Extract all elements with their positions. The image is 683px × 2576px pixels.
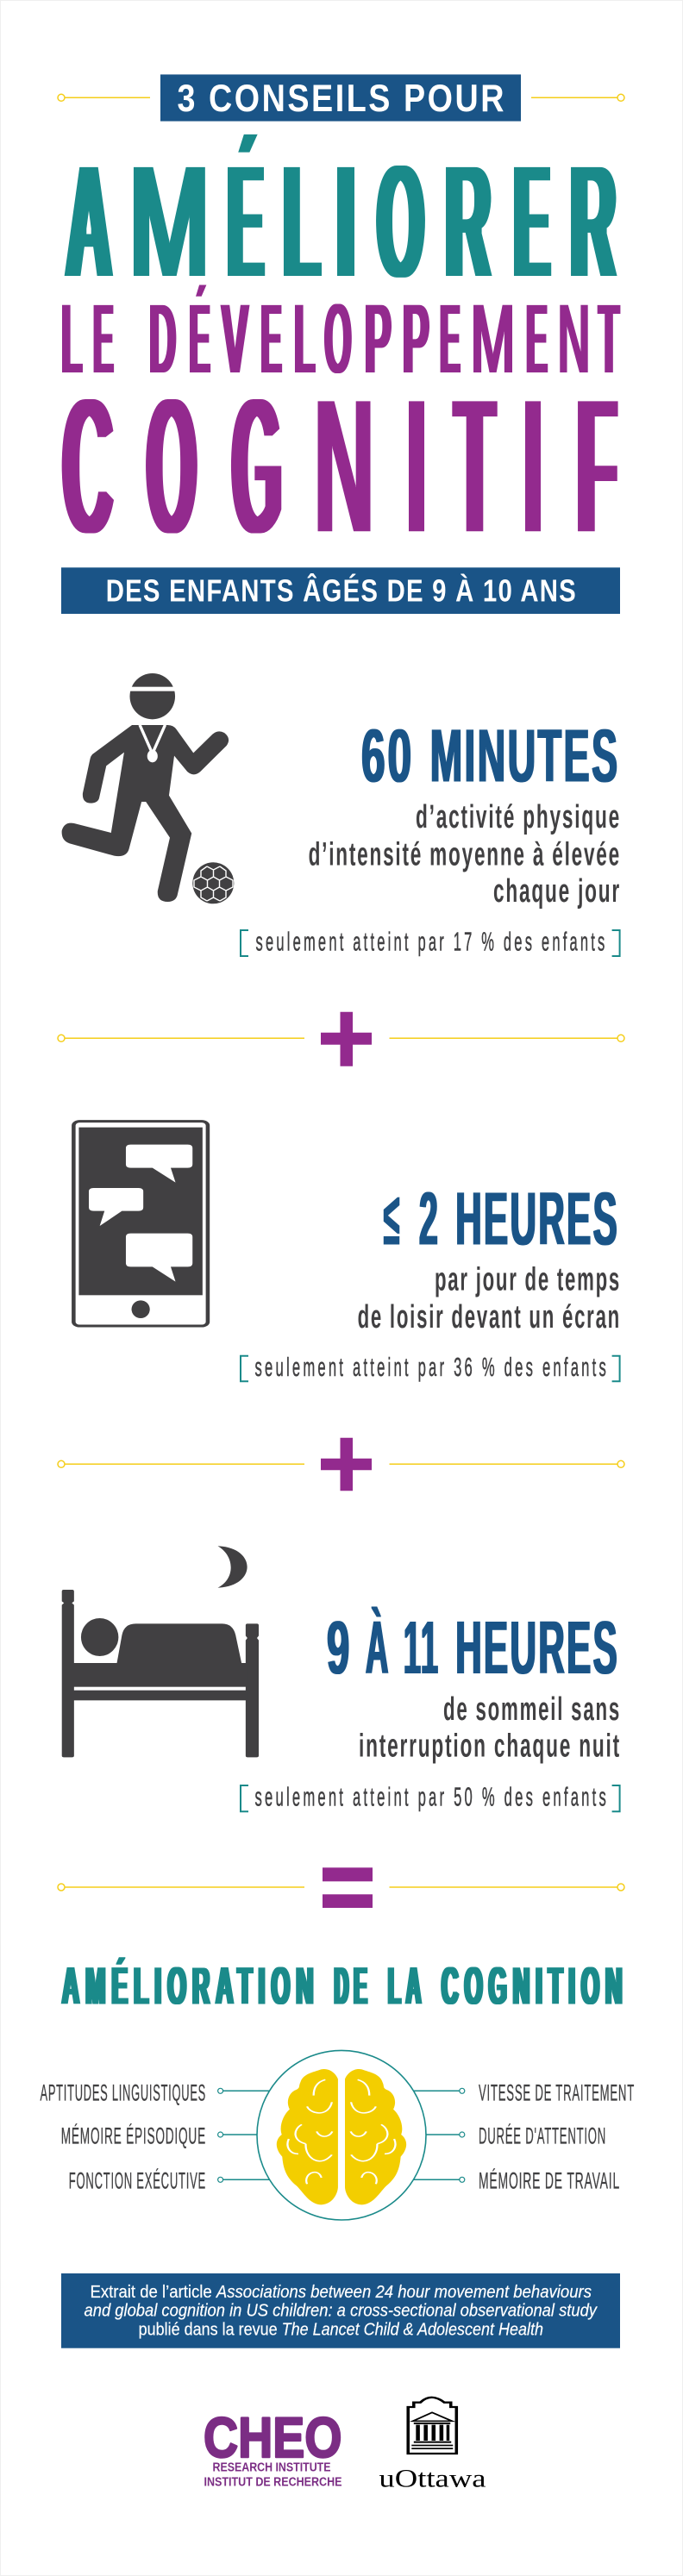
heading: cognition improvement: LA — [388, 1956, 426, 2015]
title line: AMÉLIORER: E — [514, 128, 549, 314]
title line: LE DÉVELOPPEMENT: E — [526, 282, 548, 396]
heading: 9 to 11 hours: 9 — [327, 1606, 352, 1690]
icon: smartphone with chat bubbles — [73, 1122, 208, 1326]
title line: LE DÉVELOPPEMENT — [61, 282, 619, 396]
title line: COGNITIF: O — [147, 354, 197, 577]
header ribbon: 3 CONSEILS POUR — [178, 78, 506, 120]
title line: LE DÉVELOPPEMENT: L — [61, 282, 82, 396]
heading: 2 hours or less: 2 — [419, 1177, 440, 1260]
title line: AMÉLIORER: L — [284, 128, 320, 314]
panel: sleep — [62, 1546, 621, 1811]
title line: LE DÉVELOPPEMENT: M — [471, 282, 515, 396]
title line: COGNITIF: C — [63, 354, 113, 577]
title line: AMÉLIORER: R — [446, 128, 491, 314]
title line: AMÉLIORER: M — [129, 128, 209, 314]
title line: AMÉLIORER: É — [228, 128, 263, 314]
logo: CHEO research institute: INSTITUT DE RECHERCHE — [204, 2475, 342, 2489]
icon: person in bed with moon — [62, 1546, 259, 1757]
labels: left — [40, 2080, 206, 2193]
heading: 2 hours or less: ≤ — [384, 1177, 401, 1260]
title line: COGNITIF: G — [232, 354, 281, 577]
title line: LE DÉVELOPPEMENT: E — [261, 282, 281, 396]
logo: uOttawa — [379, 2398, 486, 2492]
heading: 9 to 11 hours: À — [366, 1606, 390, 1690]
title line: LE DÉVELOPPEMENT: N — [558, 282, 590, 396]
icon: brain — [277, 2069, 406, 2204]
connector lines — [218, 2088, 465, 2182]
heading: 2 hours or less — [384, 1177, 619, 1260]
panel: brain diagram: FONCTION EXÉCUTIVE — [69, 2167, 206, 2193]
heading: 9 to 11 hours: 11 — [404, 1606, 440, 1690]
source citation panel: and global cognition in US children: a cross-sectional observational study — [85, 2301, 598, 2321]
header ribbon — [58, 74, 624, 122]
panel: brain diagram — [40, 2050, 635, 2220]
text: activity description — [309, 799, 621, 910]
labels: right — [479, 2080, 635, 2193]
title line: LE DÉVELOPPEMENT: P — [365, 282, 392, 396]
heading: 9 to 11 hours — [327, 1606, 619, 1690]
source citation panel: Extrait de l’article Associations between 24 hour movement behaviours — [90, 2282, 592, 2302]
title line: COGNITIF: T — [455, 354, 494, 577]
title line: AMÉLIORER: A — [66, 128, 112, 314]
logo: CHEO research institute — [204, 2405, 342, 2489]
title line: COGNITIF: I — [409, 354, 424, 577]
title line: LE DÉVELOPPEMENT: E — [440, 282, 461, 396]
labels: left: MÉMOIRE ÉPISODIQUE — [61, 2123, 206, 2149]
source citation panel: publié dans la revue The Lancet Child & Adolescent Health — [139, 2319, 543, 2339]
panel: brain diagram: APTITUDES LINGUISTIQUES — [40, 2080, 206, 2106]
title line: LE DÉVELOPPEMENT: L — [294, 282, 315, 396]
title line: AMÉLIORER: I — [336, 128, 355, 314]
divider: plus — [58, 1438, 624, 1491]
heading: cognition improvement: DE — [335, 1956, 373, 2015]
title line: COGNITIF: I — [525, 354, 541, 577]
source citation panel — [61, 2273, 620, 2348]
title line: LE DÉVELOPPEMENT: É — [190, 282, 210, 396]
icon: university building — [408, 2398, 456, 2454]
title line: COGNITIF: N — [315, 354, 373, 577]
title line: AMÉLIORER: O — [378, 128, 423, 314]
text: screen time description — [358, 1262, 621, 1335]
title line: LE DÉVELOPPEMENT: D — [149, 282, 176, 396]
title line: LE DÉVELOPPEMENT: P — [403, 282, 429, 396]
divider: equals — [58, 1867, 624, 1908]
title line: LE DÉVELOPPEMENT: O — [324, 282, 352, 396]
logo: CHEO research institute: RESEARCH INSTITUTE — [212, 2461, 331, 2475]
title line: LE DÉVELOPPEMENT: E — [93, 282, 114, 396]
divider: plus — [58, 1012, 624, 1066]
logo: CHEO research institute: CHEO — [204, 2405, 342, 2469]
title line: LE DÉVELOPPEMENT: V — [222, 282, 248, 396]
heading: 60 minutes: 60 — [361, 715, 414, 798]
wordmark: uOttawa — [379, 2464, 486, 2492]
panel: physical activity — [62, 673, 621, 957]
age banner — [61, 567, 620, 614]
panel: screen time — [73, 1122, 621, 1382]
heading: cognition improvement: AMÉLIORATION — [62, 1956, 320, 2015]
icon: soccer player — [62, 673, 234, 903]
title line: COGNITIF — [63, 354, 617, 577]
text: T — [598, 282, 619, 396]
age banner: DES ENFANTS ÂGÉS DE 9 À 10 ANS — [106, 572, 577, 609]
title line: AMÉLIORER — [66, 128, 616, 314]
heading: 60 minutes — [361, 715, 620, 798]
text: sleep description — [359, 1691, 621, 1765]
oval outline — [257, 2050, 426, 2220]
